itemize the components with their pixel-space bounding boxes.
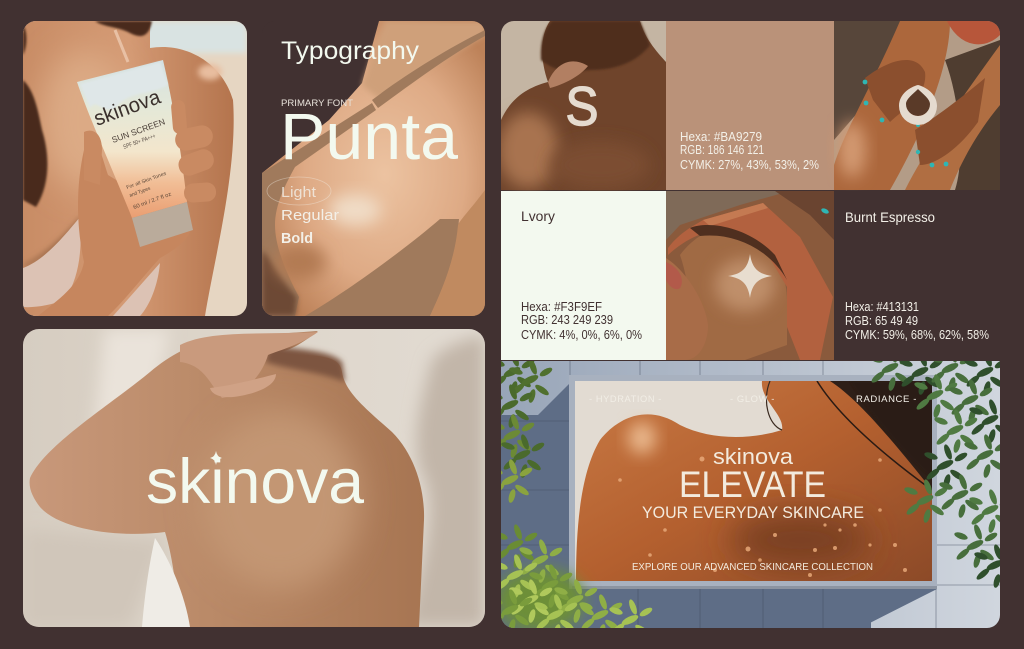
billboard tagline labels: RADIANCE -	[856, 394, 917, 405]
panel: sunscreen product photo	[23, 21, 247, 316]
photo: swimsuit	[23, 217, 81, 307]
photo: wall light and shadow	[23, 329, 485, 627]
swatch: ivory #F3F9EF: Hexa: #F3F9EF	[521, 300, 602, 314]
swatch: ivory #F3F9EF: RGB: 243 249 239	[521, 313, 613, 327]
billboard call to action: EXPLORE OUR ADVANCED SKINCARE COLLECTION	[632, 561, 873, 573]
swatch: tan #BA9279: CYMK: 27%, 43%, 53%, 2%	[680, 158, 819, 172]
icon: four-point sparkle	[728, 254, 772, 298]
nail accents	[863, 80, 948, 167]
swatch: tan #BA9279: Hexa: #BA9279	[680, 130, 762, 144]
font weight list	[267, 177, 339, 247]
product: sunscreen tube: SUN SCREEN	[110, 116, 166, 145]
photo: hand palm and forearm	[38, 150, 166, 316]
billboard subheading: YOUR EVERYDAY SKINCARE	[642, 503, 864, 522]
swatch: burnt espresso #413131: Hexa: #413131	[845, 300, 919, 314]
foliage: top left	[488, 350, 554, 504]
product: sunscreen tube: For all Skin Tones	[126, 171, 168, 191]
tube label: skinova	[91, 85, 164, 131]
swatch: burnt espresso #413131: CYMK: 59%, 68%, 62%, 58%	[845, 328, 989, 342]
panel: logo on back photo	[23, 329, 485, 627]
swatch: ivory #F3F9EF: CYMK: 4%, 0%, 6%, 0%	[521, 328, 642, 342]
swatch: tan #BA9279	[666, 21, 834, 190]
photo tile: legs with drop icon	[834, 21, 1000, 190]
font weight list: Regular	[281, 208, 339, 224]
photo tile: back with letter S	[498, 21, 666, 190]
photo: shoulder and chest	[23, 21, 234, 316]
billboard tagline labels	[590, 396, 916, 402]
shoulder photo	[576, 381, 932, 581]
billboard frame	[569, 375, 937, 589]
photo: fingers	[84, 99, 217, 203]
letter S: S	[566, 75, 598, 137]
logo: skinova wordmark: skinova	[146, 447, 365, 517]
photo: skin with dress straps	[262, 21, 485, 316]
product: sunscreen tube: 60 ml / 2.7 fl oz	[133, 191, 173, 211]
panel: typography	[262, 21, 485, 316]
billboard tagline labels: - HYDRATION -	[589, 394, 662, 405]
foliage: bottom left	[488, 523, 654, 644]
product: sunscreen tube: and Types	[129, 186, 152, 199]
billboard logo: skinova	[713, 444, 794, 469]
font weight list: Light	[281, 185, 316, 201]
photo: back and arm	[30, 331, 424, 627]
swatch: tan #BA9279: RGB: 186 146 121	[680, 143, 764, 157]
panel: colour palette grid	[498, 21, 1000, 360]
swatch: burnt espresso #413131: Burnt Espresso	[845, 209, 935, 225]
billboard screen	[575, 381, 932, 581]
icon: water drop ring	[899, 85, 937, 125]
panel: billboard mockup	[501, 361, 1000, 628]
water droplets	[618, 456, 907, 577]
billboard headline: ELEVATE	[679, 464, 826, 505]
swatch: burnt espresso #413131	[846, 212, 989, 341]
label: primary font: PRIMARY FONT	[281, 98, 353, 109]
photo: shadow under arm	[23, 215, 82, 268]
photo: white cloth	[142, 538, 190, 627]
photo: hair	[23, 21, 152, 207]
swatch: burnt espresso #413131: RGB: 65 49 49	[845, 314, 918, 328]
swatch: ivory #F3F9EF: Lvory	[521, 208, 555, 224]
heading: Typography: Typography	[281, 37, 420, 65]
font name: Punta: Punta	[280, 99, 458, 173]
wall	[501, 361, 1000, 628]
photo tile: swimsuit with sparkle	[666, 191, 834, 360]
product: sunscreen tube: SPF 50+ PA+++	[123, 133, 157, 151]
product: sunscreen tube	[77, 60, 193, 247]
icon: sparkle over i	[210, 451, 222, 465]
swatch: ivory #F3F9EF	[501, 191, 666, 360]
billboard tagline labels: - GLOW -	[730, 394, 775, 405]
font weight list: Bold	[281, 231, 313, 247]
foliage: top right	[868, 346, 1019, 589]
